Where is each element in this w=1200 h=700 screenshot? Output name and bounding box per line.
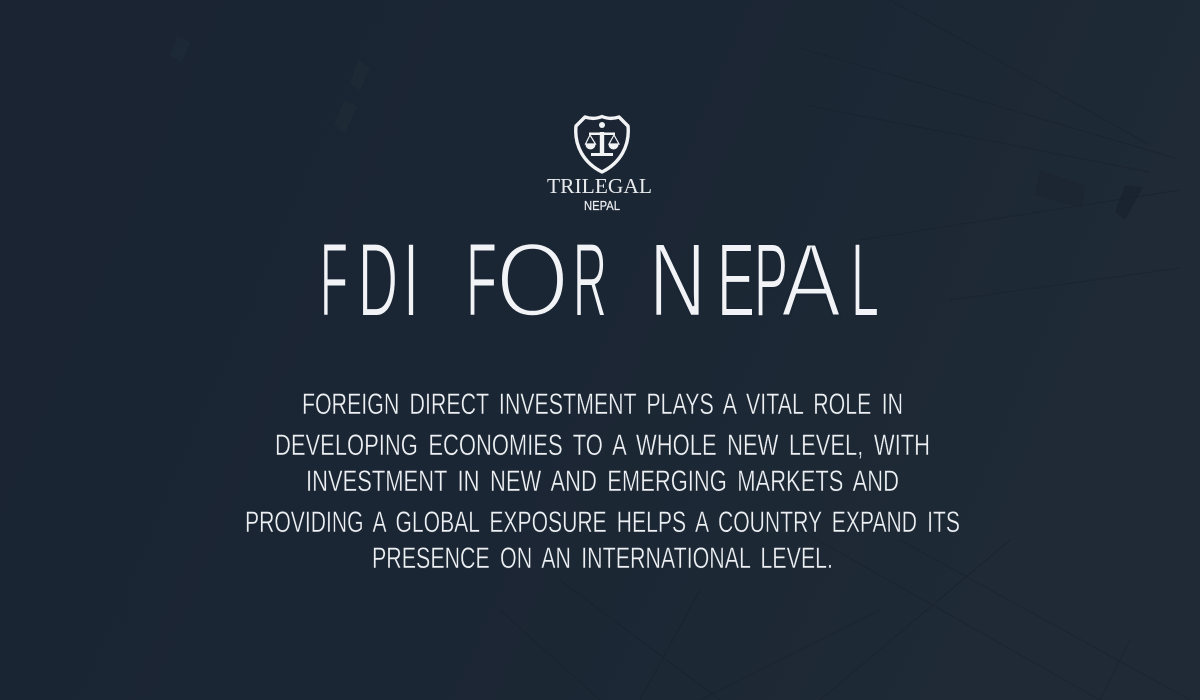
title: O — [496, 222, 569, 339]
logo sublabel: NEPAL — [584, 198, 620, 213]
title: N — [649, 222, 706, 339]
title: D — [358, 222, 398, 339]
logo wordmark: TRILEGAL — [547, 174, 652, 198]
title: F — [320, 222, 348, 339]
title: I — [403, 222, 419, 339]
line 3: INVESTMENT IN NEW AND EMERGING MARKETS AND — [306, 465, 899, 498]
title: A — [781, 222, 841, 339]
line 5: PRESENCE ON AN INTERNATIONAL LEVEL. — [372, 542, 833, 575]
infographic canvas: L — [851, 222, 879, 339]
body paragraph — [245, 388, 960, 575]
icon: shield with scales of justice — [576, 116, 628, 172]
line 2: DEVELOPING ECONOMIES TO A WHOLE NEW LEVEL, WITH — [275, 429, 930, 462]
line 1: FOREIGN DIRECT INVESTMENT PLAYS A VITAL ROLE IN — [302, 388, 903, 421]
title: R — [573, 222, 607, 339]
title: P — [754, 222, 788, 339]
title: F — [466, 222, 497, 339]
title: E — [717, 222, 755, 339]
logo: Trilegal Nepal — [547, 116, 652, 213]
